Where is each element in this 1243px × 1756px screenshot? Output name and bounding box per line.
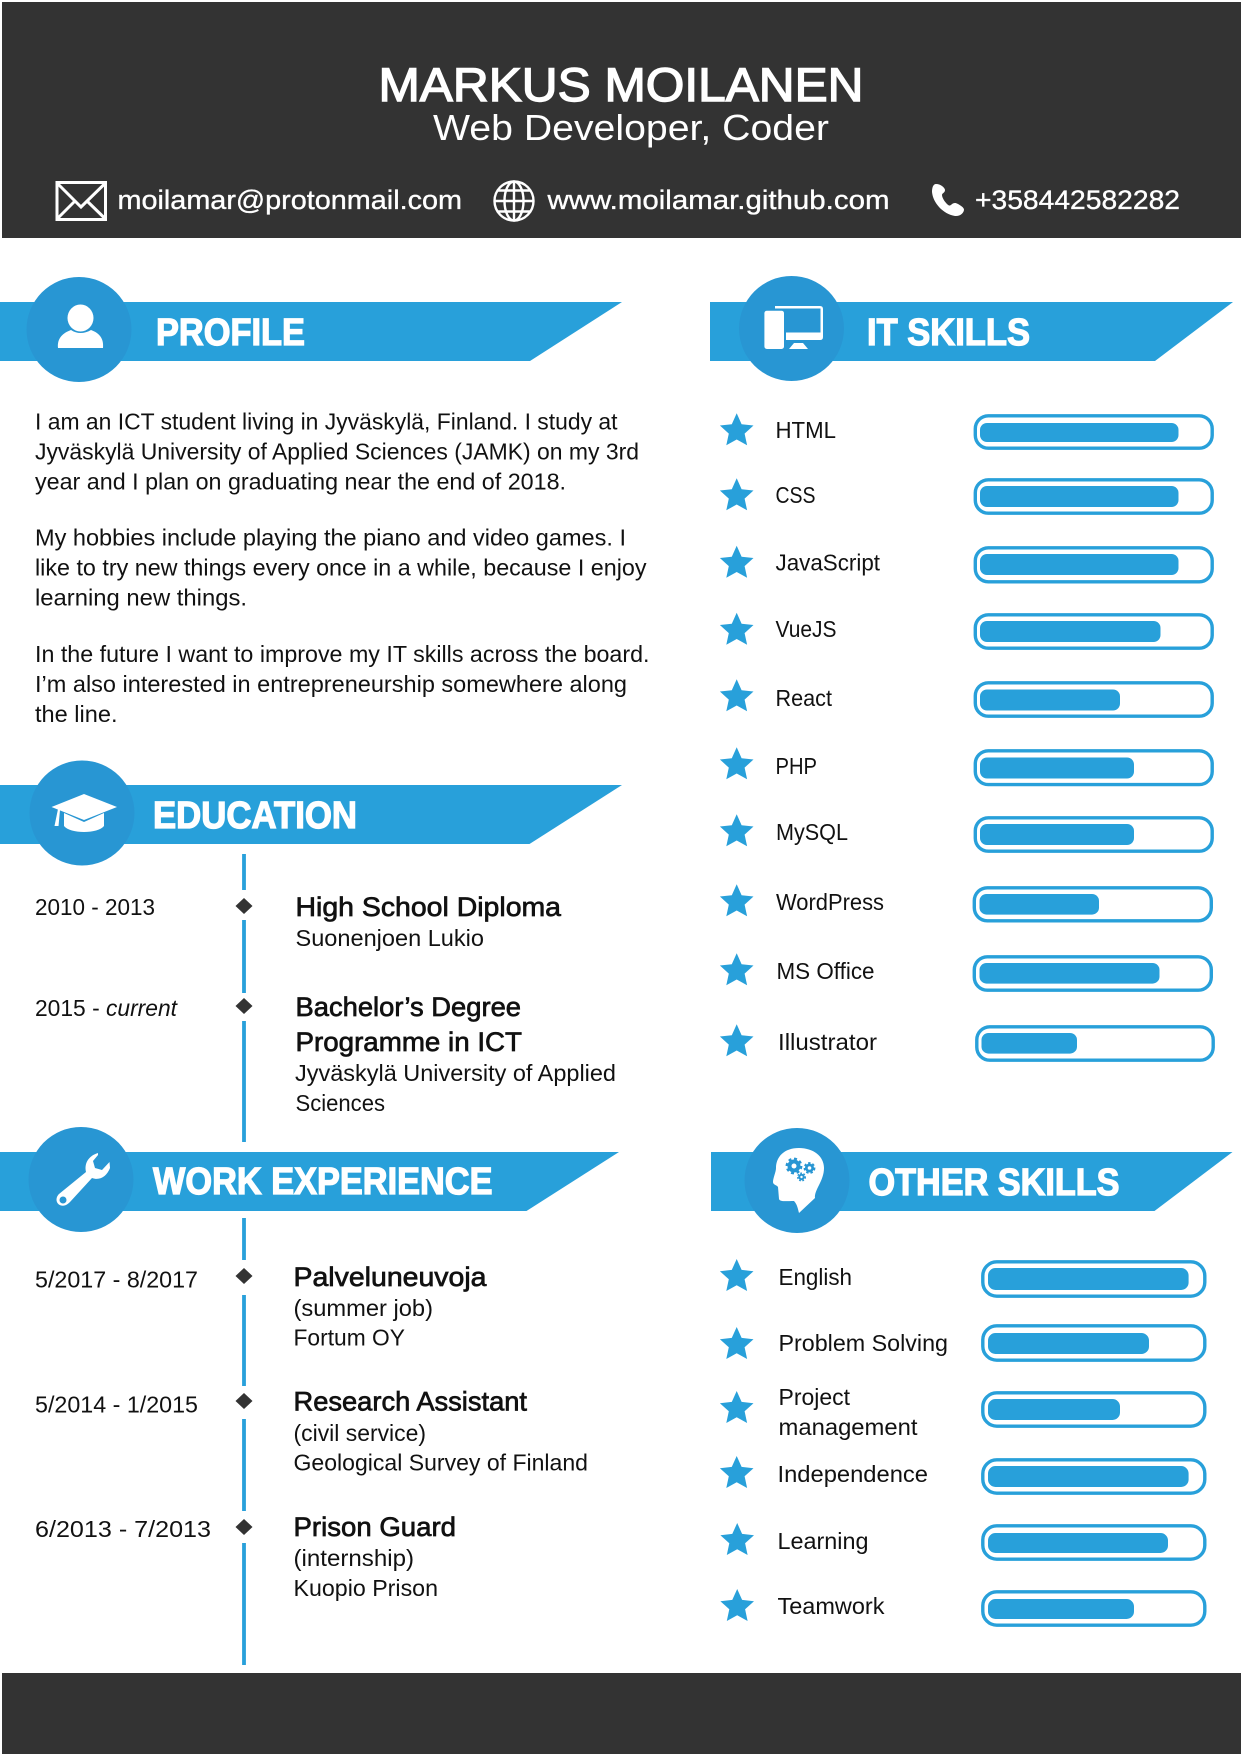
name title: MARKUS MOILANEN — [378, 59, 864, 112]
profile text: like to try new things every once in a while, because I enjoy — [35, 554, 647, 580]
profile banner — [0, 277, 622, 382]
skill: Project management: Project — [778, 1384, 850, 1410]
education banner — [0, 760, 622, 866]
icon: computer — [764, 306, 823, 349]
other skills heading: OTHER SKILLS — [868, 1162, 1120, 1204]
work banner — [0, 1127, 619, 1232]
entry: bachelor — [35, 992, 616, 1116]
panel: profile — [0, 277, 650, 727]
skill: WordPress — [720, 884, 1211, 921]
skill: Illustrator: Illustrator — [778, 1029, 877, 1055]
skill: CSS — [720, 478, 1212, 513]
profile text: I’m also interested in entrepreneurship somewhere along — [35, 671, 627, 697]
icon: phone — [932, 184, 964, 216]
entry: prison guard: Prison Guard — [294, 1512, 456, 1542]
icon: graduation cap — [52, 794, 117, 832]
entry: research assistant: 5/2014 - 1/2015 — [35, 1392, 198, 1418]
skill: MS Office — [720, 953, 1211, 990]
skill: Learning — [720, 1523, 1205, 1559]
entry: research assistant: Geological Survey of Finland — [294, 1450, 588, 1476]
profile text: In the future I want to improve my IT skills across the board. — [35, 641, 650, 667]
icon: globe — [494, 182, 534, 220]
skill: Project management — [720, 1384, 1205, 1440]
skill: English: English — [778, 1264, 852, 1290]
entry: bachelor: Sciences — [296, 1090, 385, 1116]
footer band — [2, 1673, 1241, 1754]
email: moilamar@protonmail.com — [118, 185, 462, 215]
header band — [2, 2, 1241, 238]
timeline: work — [236, 1218, 252, 1665]
profile heading: PROFILE — [156, 312, 305, 354]
skill: JavaScript: JavaScript — [776, 550, 880, 576]
skill: React — [720, 679, 1212, 716]
IT skills heading: IT SKILLS — [867, 312, 1030, 354]
skill: VueJS: VueJS — [776, 616, 836, 642]
education heading: EDUCATION — [153, 795, 357, 837]
entry: palveluneuvoja: 5/2017 - 8/2017 — [35, 1266, 198, 1292]
skill: HTML: HTML — [776, 417, 836, 443]
entry: prison guard: Kuopio Prison — [294, 1575, 438, 1601]
panel: other skills — [711, 1128, 1232, 1625]
timeline: education — [236, 854, 252, 1142]
profile text: year and I plan on graduating near the end of 2018. — [35, 468, 566, 494]
skill: Problem Solving — [720, 1326, 1205, 1360]
skill: MS Office: MS Office — [776, 958, 874, 984]
entry: bachelor: Bachelor’s Degree — [296, 992, 521, 1022]
entry: high school: Suonenjoen Lukio — [296, 925, 484, 951]
skill: Independence: Independence — [778, 1461, 928, 1487]
profile text: My hobbies include playing the piano and video games. I — [35, 524, 626, 550]
entry: research assistant: Research Assistant — [294, 1386, 528, 1416]
skill: Teamwork: Teamwork — [778, 1593, 885, 1619]
skill: Project management: management — [778, 1414, 918, 1440]
entry: bachelor: 2015 - current — [35, 995, 178, 1021]
skill: PHP: PHP — [776, 753, 817, 779]
website: www.moilamar.github.com — [546, 185, 890, 215]
panel: work experience — [0, 1127, 619, 1665]
skill: React: React — [776, 685, 832, 711]
work heading: WORK EXPERIENCE — [153, 1161, 492, 1203]
skill: MySQL: MySQL — [776, 819, 848, 845]
skill: HTML — [720, 413, 1212, 448]
entry: high school: 2010 - 2013 — [35, 894, 155, 920]
entry: palveluneuvoja — [35, 1262, 488, 1350]
entry: bachelor: Jyväskylä University of Applied — [295, 1060, 616, 1086]
skill: Illustrator — [720, 1024, 1213, 1060]
skill: Independence — [720, 1456, 1205, 1493]
skill: JavaScript — [720, 546, 1212, 582]
entry: palveluneuvoja: Palveluneuvoja — [294, 1262, 488, 1292]
entry: prison guard — [35, 1512, 456, 1601]
icon: wrench — [57, 1153, 110, 1206]
entry: prison guard: (internship) — [294, 1545, 414, 1571]
entry: high school: High School Diploma — [296, 892, 562, 922]
skill: CSS: CSS — [776, 482, 816, 508]
other skills banner — [711, 1128, 1232, 1233]
entry: research assistant — [35, 1386, 588, 1476]
entry: prison guard: 6/2013 - 7/2013 — [35, 1516, 211, 1542]
skill: WordPress: WordPress — [776, 889, 884, 915]
profile text: Jyväskylä University of Applied Sciences (JAMK) on my 3rd — [35, 438, 639, 464]
icon: head with gears — [773, 1148, 824, 1213]
role subtitle: Web Developer, Coder — [433, 107, 829, 148]
skill: Learning: Learning — [778, 1528, 868, 1554]
skill: MySQL — [720, 814, 1212, 851]
profile text — [35, 408, 650, 727]
entry: palveluneuvoja: (summer job) — [294, 1295, 433, 1321]
skill: VueJS — [720, 613, 1212, 648]
entry: high school — [35, 892, 562, 951]
panel: IT skills — [710, 276, 1233, 1060]
skill: English — [720, 1259, 1205, 1296]
entry: research assistant: (civil service) — [294, 1420, 426, 1446]
icon: person — [58, 304, 103, 348]
skill: PHP — [720, 747, 1212, 785]
skill: Problem Solving: Problem Solving — [778, 1330, 948, 1356]
panel: education — [0, 760, 622, 1142]
profile text: the line. — [35, 701, 118, 727]
IT skills banner — [710, 276, 1233, 381]
skill: Teamwork — [720, 1589, 1205, 1625]
profile text: learning new things. — [35, 584, 247, 610]
phone number: +358442582282 — [975, 185, 1180, 215]
profile text: I am an ICT student living in Jyväskylä, Finland. I study at — [35, 408, 618, 434]
entry: bachelor: Programme in ICT — [296, 1027, 522, 1057]
entry: palveluneuvoja: Fortum OY — [294, 1324, 405, 1350]
icon: envelope — [57, 182, 106, 220]
